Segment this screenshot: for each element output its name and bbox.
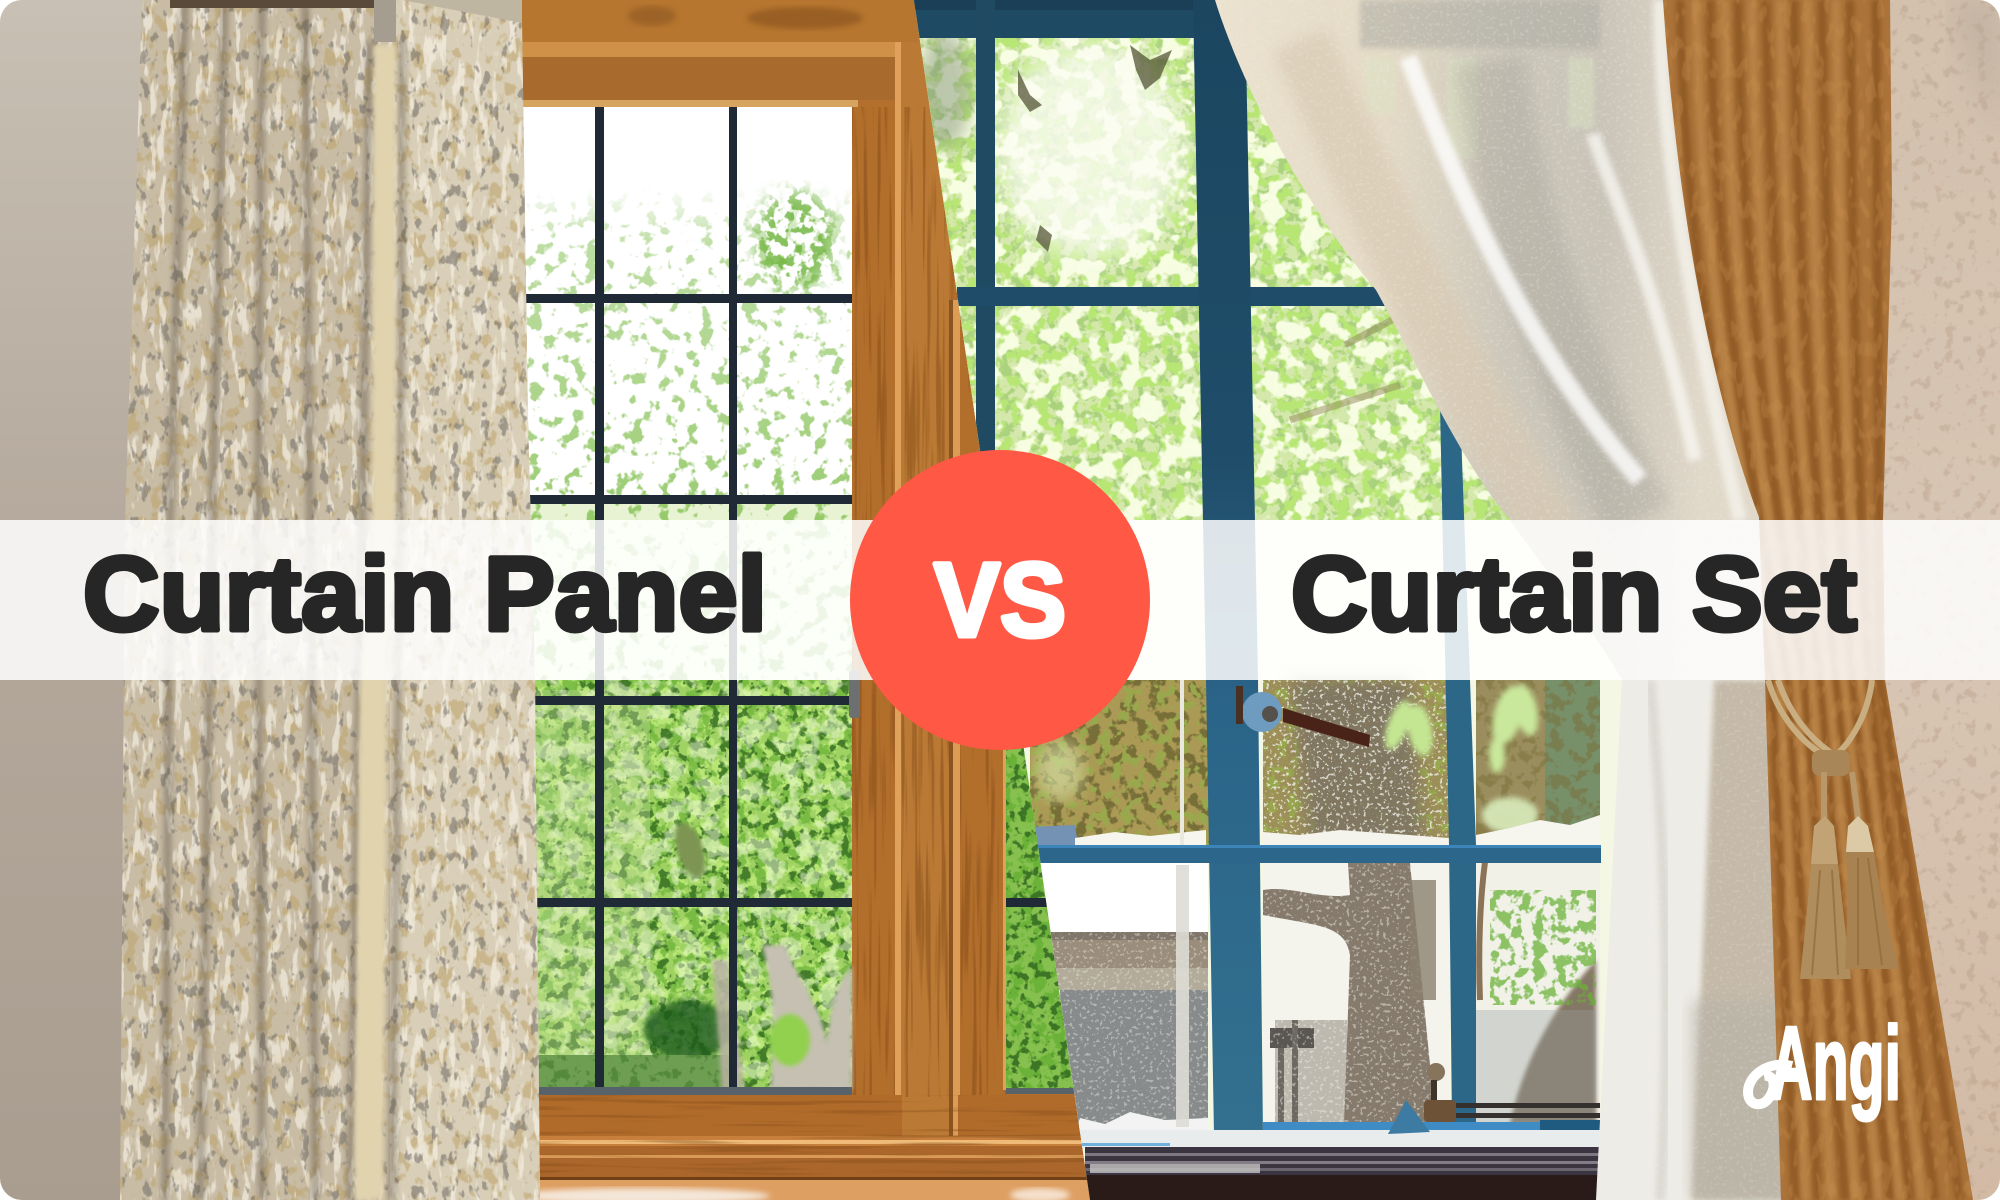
left window muntins	[522, 107, 852, 1095]
heading: curtain panel: Curtain Panel	[83, 536, 767, 653]
sheer curtain upper	[1215, 0, 1759, 532]
heading: curtain set: Curtain Set	[1291, 536, 1857, 653]
curtain rod	[170, 0, 375, 8]
upper foliage panes	[918, 30, 1510, 520]
dark bush and hedge	[644, 1000, 732, 1060]
vs badge	[850, 450, 1150, 750]
floral curtain panel	[100, 0, 550, 1200]
photo: curtain panel side	[0, 0, 1122, 1200]
translucent title banner	[0, 520, 2000, 680]
pane: right tree	[1476, 862, 1600, 1130]
blue window frame	[914, 0, 1601, 1135]
pane: green tree	[1476, 680, 1600, 845]
window latch	[1388, 1063, 1456, 1134]
tie-back and tassels	[1768, 680, 1899, 979]
pane: trunk behind handle	[1263, 680, 1449, 845]
window latch	[849, 670, 860, 718]
pane: building	[1036, 862, 1208, 1132]
vs badge: VS	[934, 542, 1066, 659]
left window glass and foliage	[522, 107, 852, 1092]
tree trunks	[762, 945, 852, 1090]
lower sash rail and sill	[1080, 1103, 1605, 1200]
rod ring	[374, 0, 396, 42]
wood window frame	[380, 0, 1122, 1200]
second pane of wood window	[1006, 748, 1074, 1094]
right wall	[1880, 0, 2000, 1200]
logo: Angi	[1748, 1006, 1901, 1122]
pleats	[165, 0, 402, 1200]
brown drape	[1650, 0, 1990, 1200]
pane: olive tree	[1030, 680, 1210, 845]
window handle	[1236, 686, 1370, 747]
logo: Angi: Angi	[1770, 1006, 1901, 1122]
sheer curtain lower	[1590, 680, 1790, 1200]
curtain seam band	[354, 45, 396, 1200]
left wall	[0, 0, 150, 1200]
pane: tree trunk	[1263, 862, 1449, 1130]
photo: curtain set side	[900, 0, 2000, 1200]
